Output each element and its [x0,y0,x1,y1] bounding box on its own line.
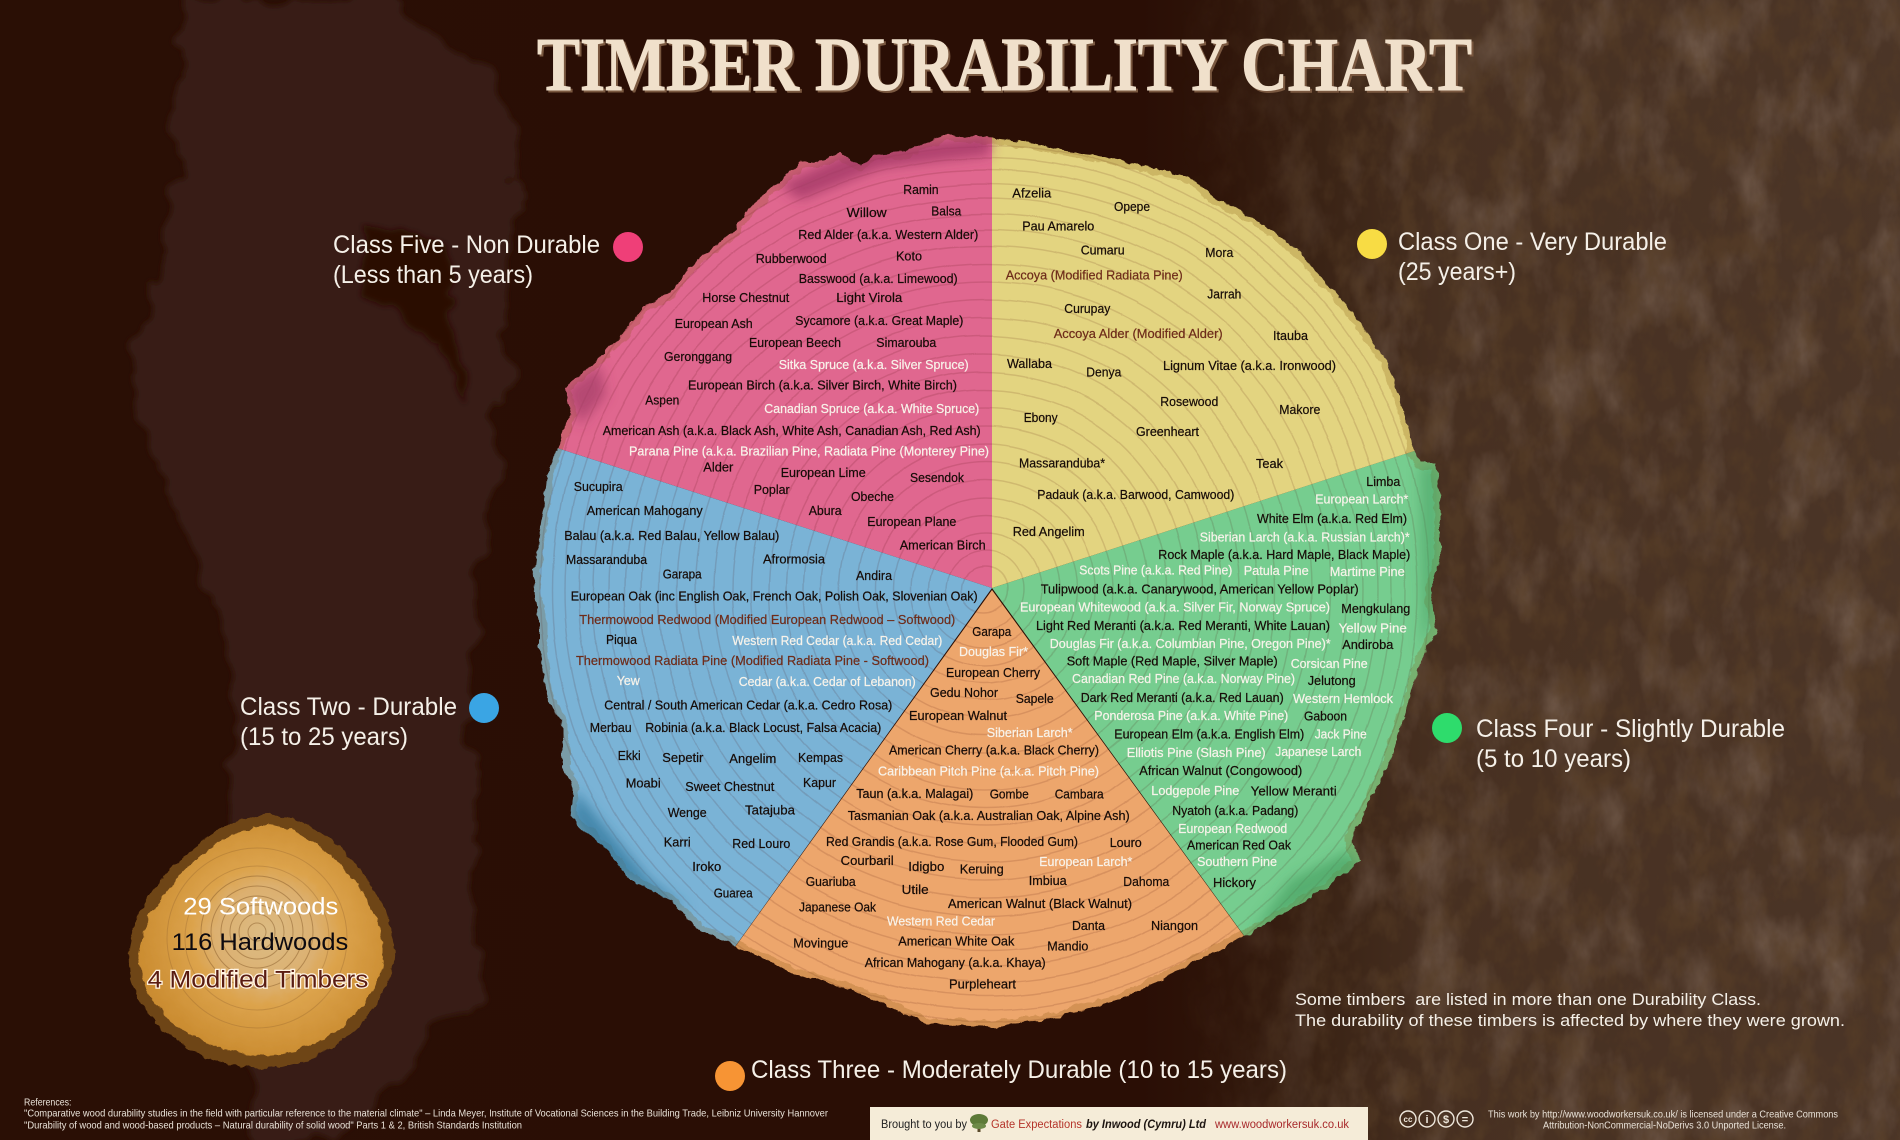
timber list: class three moderately durable: Mandio [1047,938,1088,954]
legend: class four: (5 to 10 years) [1476,745,1631,773]
timber list: class four slightly durable: Siberian Larch (a.k.a. Russian Larch)* [1200,530,1410,544]
title: TIMBER DURABILITY CHART [537,23,1472,107]
timber list: class five non durable: Red Alder (a.k.a. Western Alder) [798,227,978,242]
timber list: class four slightly durable: Douglas Fir (a.k.a. Columbian Pine, Oregon Pine)* [1050,636,1331,651]
timber list: class three moderately durable: Purpleheart [949,976,1016,992]
timber list: class four slightly durable: Limba [1366,474,1401,489]
timber list: class four slightly durable: European Larch* [1315,492,1408,506]
timber list: class one very durable: Pau Amarelo [1022,218,1094,234]
timber list: class two durable: Merbau [590,720,632,735]
timber list: class five non durable: Willow [847,205,887,220]
timber list: class five non durable: European Birch (a.k.a. Silver Birch, White Birch) [688,378,957,392]
timber list: class five non durable: European Beech [749,335,841,350]
timber list: class four slightly durable: Western Hemlock [1293,691,1393,706]
timber list: class four slightly durable: Dark Red Meranti (a.k.a. Red Lauan) [1081,690,1284,705]
license text [1488,1108,1838,1132]
timber list: class two durable: Massaranduba [566,552,648,567]
timber list: class four slightly durable: Soft Maple (Red Maple, Silver Maple) [1067,654,1278,668]
count: modified timbers: 4 Modified Timbers [148,966,368,994]
timber list: class four slightly durable: European Whitewood (a.k.a. Silver Fir, Norway Spruce) [1020,600,1330,614]
timber list: class four slightly durable: Jelutong [1308,673,1356,688]
timber list: class five non durable: Koto [896,248,922,264]
timber list: class three moderately durable: Red Grandis (a.k.a. Rose Gum, Flooded Gum) [826,834,1078,849]
timber list: class three moderately durable: Cambara [1055,786,1104,802]
sponsor box: www.woodworkersuk.co.uk [1214,1119,1349,1131]
timber list: class five non durable: Parana Pine (a.k.a. Brazilian Pine, Radiata Pine (Monterey Pine) [629,444,989,458]
timber list: class three moderately durable: Gedu Nohor [930,685,999,700]
timber list: class four slightly durable: Japanese Larch [1275,744,1361,759]
timber list: class one very durable: Accoya (Modified Radiata Pine) [1006,268,1183,282]
timber list: class four slightly durable: Yellow Meranti [1251,784,1337,798]
timber list: class three moderately durable: Siberian Larch* [987,725,1073,740]
timber list: class five non durable: Sesendok [910,470,964,485]
note: timbers in more than one class: Some timbers are listed in more than one Durability Class. [1295,990,1761,1009]
icon: creative commons badges [1400,1111,1473,1127]
timber list: class five non durable: Rubberwood [756,251,827,266]
timber list: class two durable: Guarea [714,886,753,900]
timber list: class one very durable: Lignum Vitae (a.k.a. Ironwood) [1163,358,1336,373]
timber list: class two durable: Iroko [692,859,721,874]
small log with timber counts [129,813,394,1068]
legend: class one: (25 years+) [1398,258,1516,286]
timber list: class four slightly durable: Patula Pine [1244,563,1309,578]
timber list: class one very durable: Mora [1205,245,1234,260]
timber list: class four slightly durable: European Elm (a.k.a. English Elm) [1114,726,1304,742]
timber list: class two durable: Yew [617,673,640,688]
timber list: class five non durable: Alder [703,460,734,474]
timber list: class one very durable: Wallaba [1007,356,1053,371]
note: timbers in more than one class: The durability of these timbers is affected by where they were grown. [1295,1011,1845,1030]
timber list: class one very durable: Massaranduba* [1019,456,1105,470]
timber list: class two durable: European Oak (inc English Oak, French Oak, Polish Oak, Slovenian Oak) [571,588,978,604]
count: hardwoods: 116 Hardwoods [172,929,348,956]
timber list: class one very durable: Denya [1086,364,1122,380]
timber list: class two durable: American Mahogany [587,503,703,518]
license text: This work by http://www.woodworkersuk.co.uk/ is licensed under a Creative Commons [1488,1108,1838,1120]
timber list: class five non durable: European Ash [675,316,753,331]
timber list: class three moderately durable: Idigbo [908,859,944,874]
timber list: class three moderately durable: Garapa [972,624,1012,639]
growth rings [541,146,1429,1034]
legend: class five: (Less than 5 years) [333,261,533,289]
timber list: class two durable: Thermowood Redwood (Modified European Redwood – Softwood) [579,612,955,627]
timber list: class two durable: Robinia (a.k.a. Black Locust, Falsa Acacia) [645,720,881,735]
icon: creative commons badges: = [1462,1114,1468,1126]
legend: class three: Class Three - Moderately Durable (10 to 15 years) [751,1056,1287,1084]
timber list: class four slightly durable: Elliotis Pine (Slash Pine) [1127,745,1266,760]
timber list: class one very durable: Makore [1279,402,1320,417]
references: "Durability of wood and wood-based products – Natural durability of solid wood" Parts 1 & 2, British Standards Institution [24,1120,522,1132]
timber list: class five non durable: Obeche [851,489,894,504]
timber list: class one very durable: Red Angelim [1013,524,1085,539]
timber list: class four slightly durable: Ponderosa Pine (a.k.a. White Pine) [1094,708,1288,723]
timber list: class three moderately durable: Movingue [793,936,848,950]
timber list: class three moderately durable: Danta [1072,918,1106,933]
legend: class four [1432,713,1785,773]
timber list: class three moderately durable: Courbaril [841,853,894,868]
timber list: class four slightly durable: Andiroba [1342,637,1394,652]
timber list: class five non durable: Simarouba [876,335,937,350]
timber list: class two durable [564,479,978,900]
timber list: class two durable: Sucupira [574,479,623,494]
timber list: class four slightly durable: American Red Oak [1187,838,1291,852]
legend: class two [240,693,499,751]
icon: creative commons badges: cc [1404,1115,1413,1124]
timber list: class three moderately durable: European Larch* [1039,854,1132,869]
timber list: class one very durable: Ebony [1024,410,1058,425]
sponsor box: by Inwood (Cymru) Ltd [1086,1119,1207,1131]
timber list: class two durable: Ekki [618,748,641,763]
references: "Comparative wood durability studies in the field with particular reference to the material climate" – Linda Meyer, Institute of Vocational Sciences in the Building Trade, Leibniz University Hannover [24,1108,828,1120]
note: timbers in more than one class [1295,990,1845,1030]
timber list: class five non durable: Light Virola [836,290,903,305]
timber list: class two durable: Karri [664,834,691,850]
timber list: class five non durable: European Plane [867,514,956,529]
timber list: class three moderately durable: Japanese Oak [799,900,876,914]
timber list: class five non durable: American Birch [900,538,986,552]
timber list: class five non durable: Sycamore (a.k.a. Great Maple) [795,313,963,328]
legend: class two: Class Two - Durable [240,693,457,721]
timber list: class four slightly durable: Rock Maple (a.k.a. Hard Maple, Black Maple) [1158,547,1410,562]
timber list: class one very durable: Accoya Alder (Modified Alder) [1054,326,1223,341]
timber list: class three moderately durable: Utile [902,882,929,897]
timber list: class two durable: Angelim [729,751,776,766]
timber list: class three moderately durable: Dahoma [1123,874,1170,889]
timber list: class three moderately durable: American White Oak [898,934,1015,948]
timber list: class two durable: Cedar (a.k.a. Cedar of Lebanon) [739,674,916,689]
timber list: class two durable: Wenge [668,805,707,820]
timber list: class three moderately durable: Sapele [1016,691,1054,706]
sector: class three orange [735,590,1244,1029]
timber list: class two durable: Piqua [606,632,638,647]
timber list: class four slightly durable: Hickory [1213,875,1256,890]
timber list: class three moderately durable: Imbiua [1029,873,1067,888]
timber list: class four slightly durable: Canadian Red Pine (a.k.a. Norway Pine) [1072,671,1295,686]
timber list: class two durable: Moabi [626,776,661,790]
timber list: class three moderately durable: Louro [1110,835,1142,850]
timber list: class four slightly durable: White Elm (a.k.a. Red Elm) [1257,511,1407,526]
license text: Attribution-NonCommercial-NoDerivs 3.0 Unported License. [1543,1120,1786,1132]
timber list: class three moderately durable: Niangon [1151,918,1198,933]
sector: class five pink [558,134,992,588]
timber list: class four slightly durable: European Redwood [1178,821,1287,836]
timber list: class five non durable: European Lime [781,465,866,480]
timber list: class two durable: Sepetir [662,750,704,765]
wood slice wheel divided into five durability classes [450,100,1480,1050]
timber list: class four slightly durable: Nyatoh (a.k.a. Padang) [1172,803,1298,818]
count: softwoods: 29 Softwoods [183,894,338,920]
timber list: class four slightly durable: African Walnut (Congowood) [1139,763,1302,778]
legend: class one [1357,228,1667,286]
sector: class one yellow [992,137,1414,588]
timber list: class four slightly durable: Mengkulang [1341,601,1410,616]
timber list: class five non durable: Balsa [931,204,962,218]
references [24,1096,828,1132]
timber list: class two durable: Red Louro [732,836,790,851]
timber list: class three moderately durable [793,624,1198,992]
timber list: class one very durable: Padauk (a.k.a. Barwood, Camwood) [1037,487,1234,502]
icon: creative commons badges: i [1425,1114,1429,1126]
timber list: class two durable: Tatajuba [745,802,796,818]
timber list: class two durable: Kempas [798,750,843,765]
sponsor box: Gate Expectations [991,1119,1082,1131]
timber list: class five non durable: Canadian Spruce (a.k.a. White Spruce) [764,401,979,416]
timber list: class one very durable: Teak [1256,456,1283,471]
timber list: class four slightly durable: Yellow Pine [1339,620,1407,636]
timber list: class four slightly durable: Gaboon [1304,708,1347,724]
timber list: class three moderately durable: American Walnut (Black Walnut) [948,896,1132,911]
references: References: [24,1096,72,1108]
timber list: class five non durable: Basswood (a.k.a. Limewood) [799,271,958,286]
timber list: class one very durable: Cumaru [1081,242,1125,258]
timber list: class three moderately durable: Douglas Fir* [959,644,1028,659]
timber list: class four slightly durable [1020,474,1410,890]
timber list: class three moderately durable: Guariuba [806,874,856,889]
timber list: class one very durable: Afzelia [1012,186,1052,200]
timber list: class three moderately durable: American Cherry (a.k.a. Black Cherry) [889,742,1099,758]
timber list: class three moderately durable: Gombe [990,786,1029,802]
sponsor box: Brought to you by [881,1119,967,1131]
legend: class five: Class Five - Non Durable [333,231,600,259]
coloured sectors with growth rings [532,134,1442,1029]
timber list: class four slightly durable: Light Red Meranti (a.k.a. Red Meranti, White Lauan) [1036,618,1330,633]
timber list: class four slightly durable: Martime Pine [1330,564,1405,579]
timber list: class two durable: Andira [856,568,893,583]
timber list: class five non durable: Poplar [754,482,790,497]
timber list: class three moderately durable: European Walnut [909,708,1007,723]
timber list: class five non durable: Geronggang [664,349,732,364]
icon: creative commons badges: $ [1443,1114,1449,1126]
timber list: class one very durable: Jarrah [1207,286,1241,302]
timber list: class four slightly durable: Scots Pine (a.k.a. Red Pine) [1079,562,1232,578]
legend: class four: Class Four - Slightly Durable [1476,715,1785,743]
sector: class two blue [532,448,992,946]
timber list: class three moderately durable: African Mahogany (a.k.a. Khaya) [865,955,1046,970]
timber list: class two durable: Garapa [663,566,702,582]
timber list: class three moderately durable: European Cherry [946,665,1040,680]
timber list: class two durable: Central / South American Cedar (a.k.a. Cedro Rosa) [604,698,892,712]
timber list: class four slightly durable: Southern Pine [1197,854,1277,869]
bark rim shading [533,135,1440,1027]
timber list: class two durable: Western Red Cedar (a.k.a. Red Cedar) [732,633,942,648]
dark bark patches [565,135,1440,935]
timber list: class one very durable: Curupay [1064,301,1111,316]
timber list: class one very durable [1006,186,1336,539]
timber list: class three moderately durable: Keruing [960,862,1004,876]
timber list: class four slightly durable: Tulipwood (a.k.a. Canarywood, American Yellow Poplar) [1041,582,1359,596]
timber list: class four slightly durable: Corsican Pine [1291,656,1368,671]
sector: class four green [992,451,1442,936]
timber list: class three moderately durable: Caribbean Pitch Pine (a.k.a. Pitch Pine) [878,764,1099,778]
timber list: class two durable: Balau (a.k.a. Red Balau, Yellow Balau) [564,528,779,543]
timber list: class five non durable: Sitka Spruce (a.k.a. Silver Spruce) [779,357,969,372]
timber list: class five non durable: American Ash (a.k.a. Black Ash, White Ash, Canadian Ash, Red Ash) [603,423,981,438]
timber list: class three moderately durable: Western Red Cedar [887,914,996,928]
timber list: class five non durable: Horse Chestnut [702,290,790,305]
timber list: class one very durable: Greenheart [1136,424,1199,439]
sponsor box [870,1107,1368,1140]
icon: tree logo [970,1114,988,1132]
timber list: class two durable: Kapur [803,775,837,790]
timber list: class two durable: Sweet Chestnut [685,779,775,794]
timber list: class five non durable: Ramin [903,182,939,197]
legend: class two: (15 to 25 years) [240,723,408,751]
timber list: class four slightly durable: Lodgepole Pine [1151,783,1239,798]
timber list: class one very durable: Itauba [1273,328,1309,343]
timber list: class three moderately durable: Taun (a.k.a. Malagai) [856,786,973,801]
timber list: class five non durable [603,182,989,552]
timber list: class four slightly durable: Jack Pine [1315,726,1367,742]
timber list: class two durable: Afrormosia [763,552,826,566]
timber list: class one very durable: Opepe [1114,199,1150,214]
timber list: class one very durable: Rosewood [1160,394,1218,409]
legend: class five [333,231,643,289]
log cross-section illustration [129,813,394,1068]
timber list: class two durable: Thermowood Radiata Pine (Modified Radiata Pine - Softwood) [576,653,929,668]
legend: class one: Class One - Very Durable [1398,228,1667,256]
timber list: class five non durable: Abura [809,503,842,518]
timber list: class five non durable: Aspen [645,392,679,408]
timber list: class three moderately durable: Tasmanian Oak (a.k.a. Australian Oak, Alpine Ash) [848,808,1130,823]
